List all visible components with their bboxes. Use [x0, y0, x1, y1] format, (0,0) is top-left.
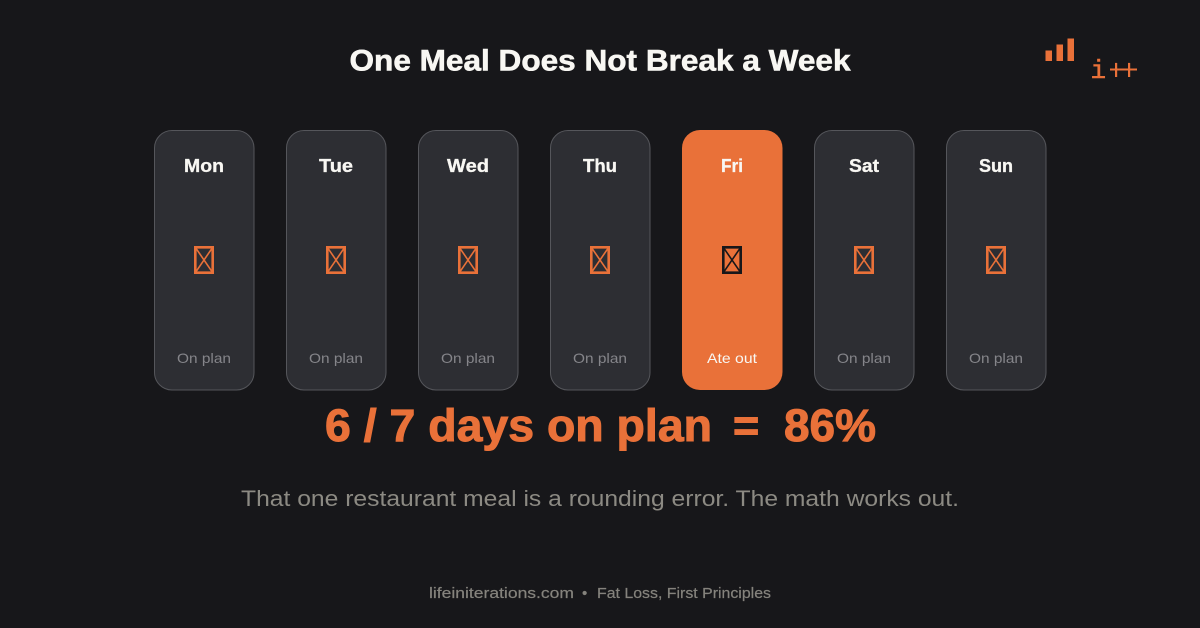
logo wordmark: [1090, 56, 1137, 88]
status: on plan: On plan: [573, 350, 627, 366]
headline stat: 6 / 7 days on plan: [325, 400, 712, 451]
panel: Saturday: [814, 130, 914, 390]
panel: Wednesday: [418, 130, 518, 390]
label: Tue: Tue: [319, 156, 353, 176]
icon: missing glyph box: [195, 247, 213, 273]
panel: Thursday: [550, 130, 650, 390]
label: Sun: Sun: [979, 156, 1013, 176]
subtitle: That one restaurant meal is a rounding error. The math works out.: [241, 486, 959, 511]
footer: [429, 585, 771, 602]
status: on plan: On plan: [309, 350, 363, 366]
panel: Sunday: [946, 130, 1046, 390]
panel: Monday: [154, 130, 254, 390]
icon: missing glyph box: [327, 247, 345, 273]
logo icon: rising bars: [1046, 38, 1074, 61]
status: on plan: On plan: [441, 350, 495, 366]
icon: missing glyph box: [723, 247, 741, 273]
footer: •: [582, 585, 587, 602]
icon: missing glyph box: [459, 247, 477, 273]
label: Sat: Sat: [849, 156, 879, 176]
headline stat: =: [733, 400, 759, 451]
icon: missing glyph box: [855, 247, 873, 273]
status: ate out: Ate out: [707, 350, 757, 366]
logo wordmark: i: [1090, 56, 1106, 86]
icon: missing glyph box: [591, 247, 609, 273]
headline stat: 86%: [784, 400, 876, 451]
logo: [1046, 38, 1137, 88]
label: Wed: Wed: [447, 156, 489, 176]
label: Thu: Thu: [583, 156, 617, 176]
title: One Meal Does Not Break a Week: [350, 44, 851, 78]
status: on plan: On plan: [837, 350, 891, 366]
panel: Tuesday: [286, 130, 386, 390]
headline stat: [325, 400, 876, 451]
label: Fri: Fri: [721, 156, 743, 176]
footer: lifeiniterations.com: [429, 585, 574, 602]
status: on plan: On plan: [969, 350, 1023, 366]
icon: missing glyph box: [987, 247, 1005, 273]
label: Mon: Mon: [184, 156, 224, 176]
footer: Fat Loss, First Principles: [597, 585, 771, 602]
status: on plan: On plan: [177, 350, 231, 366]
panel: Friday highlighted: [682, 130, 782, 390]
logo wordmark: ++: [1110, 57, 1136, 88]
